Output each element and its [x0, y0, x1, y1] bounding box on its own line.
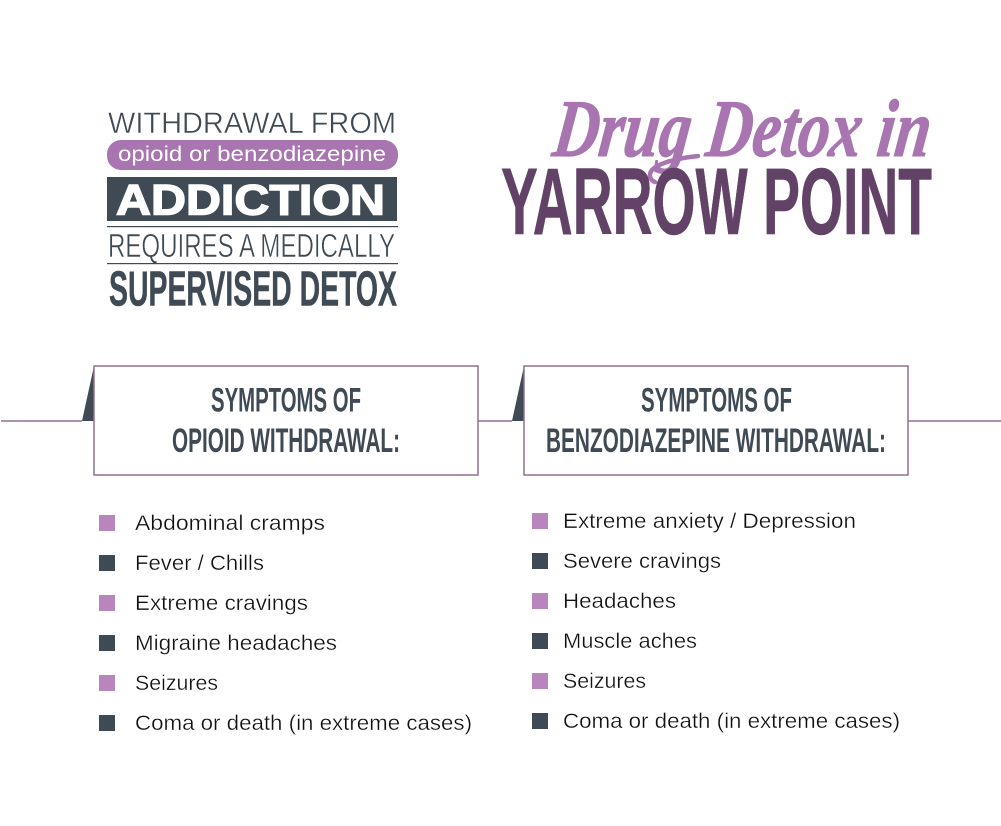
item: abdominal cramps: Abdominal cramps	[135, 512, 325, 535]
pill: opioid or benzodiazepine	[107, 140, 398, 170]
panel: benzodiazepine header	[512, 366, 908, 475]
item: severe cravings: Severe cravings	[563, 550, 721, 573]
list: benzodiazepine symptoms	[532, 510, 900, 733]
connector line	[1, 420, 1001, 422]
heading: symptoms of benzodiazepine withdrawal: SYMPTOMS OF	[641, 382, 792, 420]
heading: symptoms of opioid withdrawal: SYMPTOMS OF	[211, 382, 361, 420]
panel: opioid header	[82, 366, 478, 475]
item: muscle aches: Muscle aches	[563, 630, 697, 653]
title block: withdrawal statement	[107, 107, 398, 316]
main title	[501, 83, 937, 255]
heading: symptoms of opioid withdrawal: OPIOID WITHDRAWAL:	[172, 422, 400, 460]
banner: addiction: ADDICTION	[116, 176, 385, 224]
item: fever / chills: Fever / Chills	[135, 552, 264, 575]
item: seizures: Seizures	[135, 672, 218, 695]
item: extreme anxiety / depression: Extreme anxiety / Depression	[563, 510, 856, 533]
icon: tab wedge	[512, 366, 524, 421]
icon: tab wedge	[82, 366, 94, 421]
pill: opioid or benzodiazepine: opioid or benzodiazepine	[118, 143, 386, 166]
item: migraine headaches: Migraine headaches	[135, 632, 337, 655]
text: requires a medically: REQUIRES A MEDICALLY	[108, 227, 395, 264]
item: seizures	[99, 672, 218, 695]
title flourish	[650, 156, 698, 182]
list: opioid symptoms	[99, 512, 472, 735]
heading: withdrawal from: WITHDRAWAL FROM	[108, 107, 396, 140]
heading: symptoms of benzodiazepine withdrawal	[546, 382, 886, 460]
header box	[524, 366, 908, 475]
item: coma or death: Coma or death (in extreme cases)	[135, 712, 472, 735]
item: extreme cravings: Extreme cravings	[135, 592, 308, 615]
header box	[94, 366, 478, 475]
item: seizures: Seizures	[563, 670, 646, 693]
item: headaches: Headaches	[563, 590, 676, 613]
heading: symptoms of opioid withdrawal	[172, 382, 400, 460]
item: coma or death: Coma or death (in extreme cases)	[563, 710, 900, 733]
text: supervised detox: SUPERVISED DETOX	[109, 262, 397, 316]
